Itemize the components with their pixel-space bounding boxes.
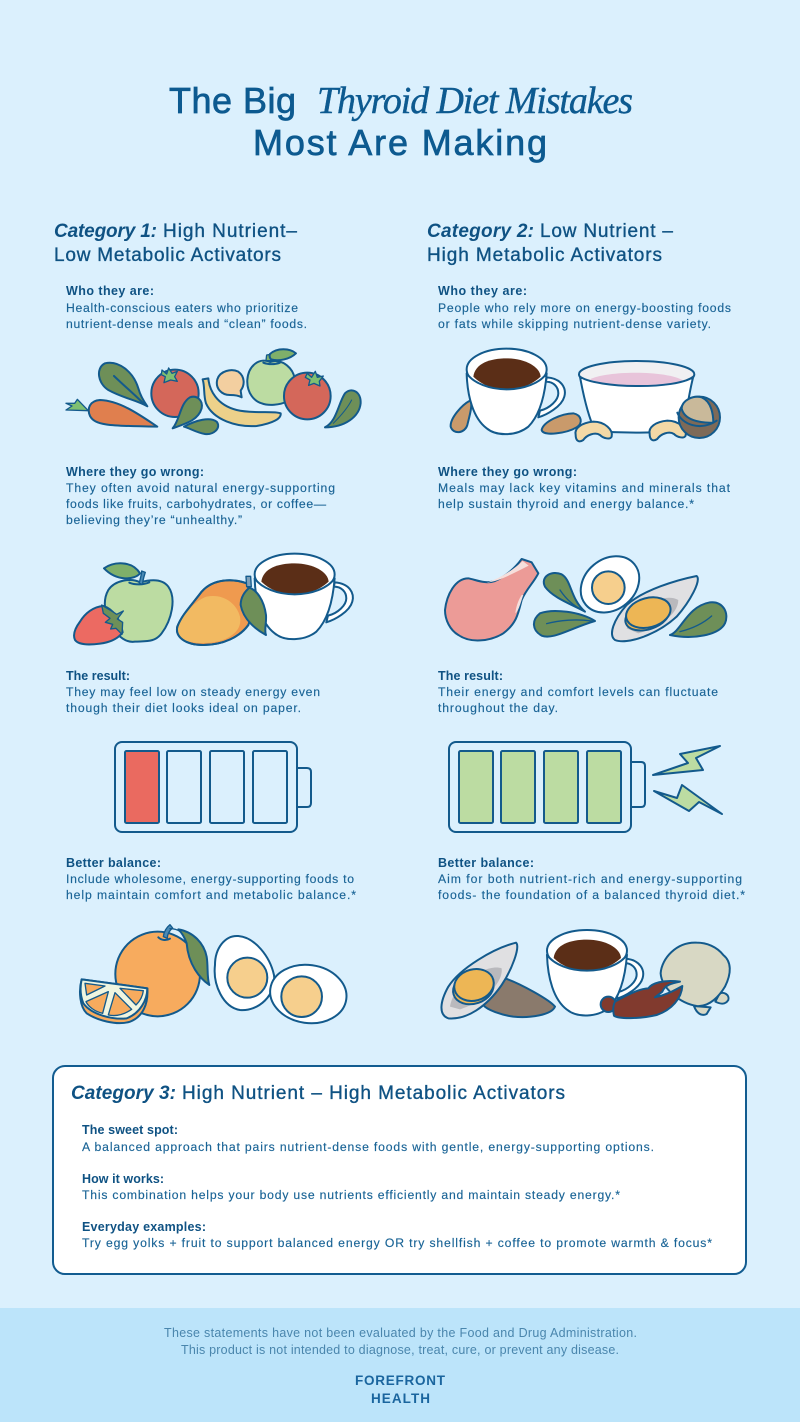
title — [169, 80, 633, 163]
logo: Forefront Health: HEALTH — [371, 1391, 430, 1406]
illustration: strawberry, apple, mango, coffee — [74, 554, 353, 645]
text: category 2 where they go wrong — [438, 465, 731, 511]
text: everyday examples — [82, 1220, 712, 1250]
text: category 1 who they are: Health-conscious eaters who prioritize — [66, 301, 298, 315]
illustration: coffee, bowl and nuts — [451, 349, 720, 441]
heading: category 3: Category 3: — [71, 1083, 176, 1104]
title: Most Are Making — [253, 122, 547, 163]
text: category 2 where they go wrong: Where they go wrong: — [438, 465, 577, 479]
text: category 2 better balance: Better balance: — [438, 856, 534, 870]
text: the sweet spot: The sweet spot: — [82, 1123, 178, 1137]
text: the sweet spot — [82, 1123, 654, 1154]
heading: category 1: Low Metabolic Activators — [54, 245, 281, 266]
text: category 1 where they go wrong — [66, 465, 335, 527]
title: The Big — [169, 80, 296, 121]
icon: low battery — [115, 742, 311, 832]
heading: category 1 — [54, 221, 297, 266]
heading: category 2 — [427, 221, 673, 266]
text: category 1 better balance: Better balance: — [66, 856, 161, 870]
text: category 1 who they are: nutrient-dense meals and “clean” foods. — [66, 317, 307, 331]
text: category 1 where they go wrong: They often avoid natural energy-supporting — [66, 481, 335, 495]
text: category 2 where they go wrong: Meals may lack key vitamins and minerals that — [438, 481, 731, 495]
text: category 1 better balance — [66, 856, 356, 902]
logo: Forefront Health — [355, 1373, 446, 1406]
heading: category 2: Category 2: — [427, 221, 534, 242]
text: category 2 the result: The result: — [438, 669, 503, 683]
text: category 2 who they are: or fats while skipping nutrient-dense variety. — [438, 317, 711, 331]
text: category 1 better balance: Include wholesome, energy-supporting foods to — [66, 872, 354, 886]
illustration: vegetables and fruit — [66, 349, 361, 434]
text: category 2 where they go wrong: help sustain thyroid and energy balance.* — [438, 497, 694, 511]
text: disclaimer — [164, 1326, 637, 1357]
illustration: orange and eggs — [80, 925, 350, 1028]
text: category 1 the result: The result: — [66, 669, 130, 683]
text: category 1 the result: They may feel low on steady energy even — [66, 685, 320, 699]
text: category 2 the result: Their energy and comfort levels can fluctuate — [438, 685, 718, 699]
footer band — [0, 1308, 800, 1422]
logo: Forefront Health: FOREFRONT — [355, 1373, 446, 1388]
text: category 1 where they go wrong: Where they go wrong: — [66, 465, 204, 479]
icon: full battery with lightning bolts — [449, 742, 722, 832]
text: category 2 better balance — [438, 856, 745, 902]
text: how it works: How it works: — [82, 1172, 164, 1186]
text: category 1 who they are: Who they are: — [66, 284, 154, 298]
text: category 2 better balance: Aim for both nutrient-rich and energy-supporting — [438, 872, 742, 886]
text: category 2 who they are: Who they are: — [438, 284, 527, 298]
text: disclaimer: These statements have not been evaluated by the Food and Drug Administration. — [164, 1326, 637, 1340]
text: category 2 the result: throughout the day. — [438, 701, 558, 715]
illustration: mussel, coffee, lobster claw, clam — [441, 930, 730, 1018]
heading: category 1: High Nutrient– — [163, 221, 297, 242]
text: how it works — [82, 1172, 620, 1202]
text: category 2 better balance: foods- the foundation of a balanced thyroid diet.* — [438, 888, 745, 902]
heading: category 2: High Metabolic Activators — [427, 245, 662, 266]
heading: category 3: High Nutrient – High Metabolic Activators — [182, 1083, 565, 1104]
text: category 2 who they are: People who rely more on energy-boosting foods — [438, 301, 731, 315]
text: category 1 who they are — [66, 284, 307, 331]
text: everyday examples: Everyday examples: — [82, 1220, 206, 1234]
text: category 1 the result — [66, 669, 320, 715]
heading: category 2: Low Nutrient – — [540, 221, 673, 242]
text: category 1 better balance: help maintain comfort and metabolic balance.* — [66, 888, 356, 902]
heading: category 1: Category 1: — [54, 221, 157, 242]
text: category 2 the result — [438, 669, 718, 715]
text: the sweet spot: A balanced approach that pairs nutrient-dense foods with gentle, energy-supporting options. — [82, 1140, 654, 1154]
text: category 1 the result: though their diet looks ideal on paper. — [66, 701, 301, 715]
text: everyday examples: Try egg yolks + fruit to support balanced energy OR try shellfish + coffee to promote warmth & focus* — [82, 1236, 712, 1250]
panel: category 3 — [53, 1066, 746, 1274]
text: disclaimer: This product is not intended to diagnose, treat, cure, or prevent any disease. — [181, 1343, 619, 1357]
text: category 1 where they go wrong: believing they’re “unhealthy.” — [66, 513, 242, 527]
title: Thyroid Diet Mistakes — [317, 80, 633, 122]
illustration: pork chop, greens, egg, mussel — [445, 545, 726, 641]
text: how it works: This combination helps your body use nutrients efficiently and maintain steady energy.* — [82, 1188, 620, 1202]
text: category 2 who they are — [438, 284, 731, 331]
text: category 1 where they go wrong: foods like fruits, carbohydrates, or coffee— — [66, 497, 327, 511]
